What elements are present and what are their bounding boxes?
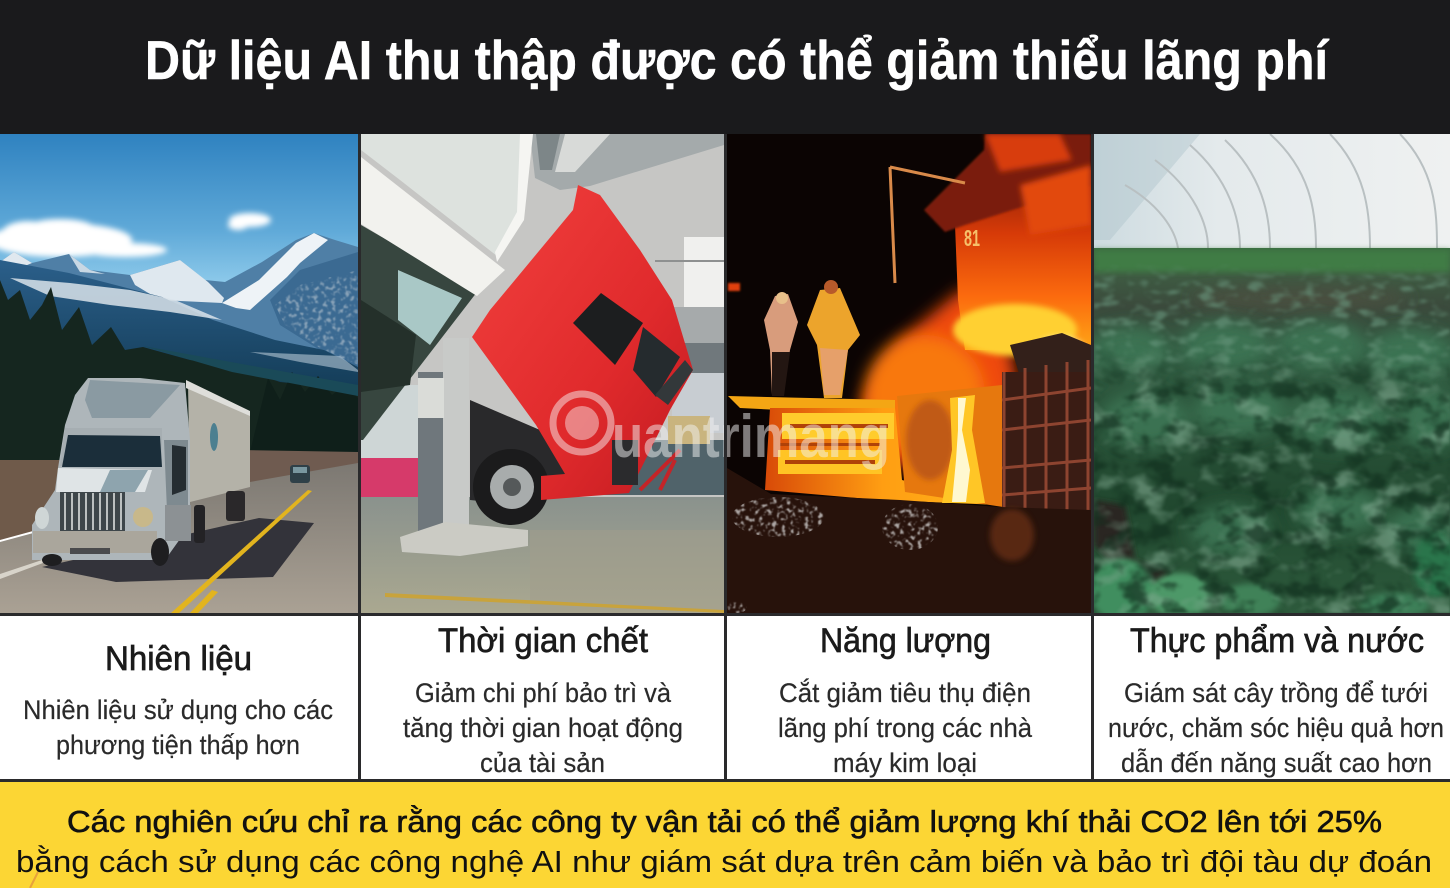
caption: Năng lượng: lãng phí trong các nhà	[778, 713, 1033, 743]
callout text	[16, 804, 1432, 879]
callout text: bằng cách sử dụng các công nghệ AI như giám sát dựa trên cảm biến và bảo trì đội tàu dự đoán	[16, 844, 1432, 879]
workers	[764, 280, 860, 398]
snowy mountains	[0, 233, 358, 400]
truck cab	[32, 378, 205, 566]
road centre line	[171, 490, 312, 613]
panel: food and water field photo	[1090, 134, 1450, 622]
title banner	[0, 0, 1450, 134]
leaf mass mid	[1090, 321, 1450, 554]
back wall fittings	[684, 237, 724, 307]
cooling grid	[1002, 360, 1091, 510]
ceiling	[530, 134, 724, 190]
suspended rod	[890, 167, 965, 283]
red service jack	[640, 450, 680, 490]
near leaf texture	[1094, 340, 1450, 613]
caption: Thực phẩm và nước: Thực phẩm và nước	[1130, 622, 1424, 660]
caption: Thời gian chết: Thời gian chết	[438, 622, 649, 660]
truck trailer	[188, 383, 250, 502]
clouds	[0, 213, 271, 257]
lifted cab white floor	[361, 157, 505, 296]
caption: Nhiên liệu: phương tiện thấp hơn	[56, 730, 300, 760]
caption: Thực phẩm và nước: Giám sát cây trồng để tưới	[1124, 678, 1428, 708]
title: Dữ liệu AI thu thập được có thể giảm thiểu lãng phí	[145, 29, 1330, 91]
molten pour glow	[953, 304, 1077, 356]
panel: energy steel mill photo	[727, 134, 1091, 613]
roadside ground	[0, 460, 60, 540]
small car	[290, 465, 310, 483]
caption: Năng lượng: Năng lượng	[820, 622, 991, 660]
caption: Thời gian chết: tăng thời gian hoạt động	[403, 713, 683, 743]
far leaf texture	[1094, 262, 1450, 382]
furnace hood	[1010, 333, 1091, 372]
caption: Nhiên liệu: Nhiên liệu sử dụng cho các	[23, 695, 333, 725]
pine forest	[0, 280, 358, 470]
slag highlights	[727, 497, 1034, 613]
caption: Năng lượng: máy kim loại	[833, 748, 977, 778]
caption: Thời gian chết: của tài sản	[480, 748, 605, 778]
caption: Thực phẩm và nước	[1108, 622, 1444, 778]
engine and wheel	[470, 400, 575, 525]
watermark	[553, 394, 890, 470]
greenhouse	[1094, 134, 1450, 250]
red truck cab	[472, 185, 693, 500]
truck shadow	[42, 518, 314, 582]
equipment row	[604, 440, 724, 495]
platform and hot machinery	[728, 385, 1003, 507]
caption: Thực phẩm và nước: dẫn đến năng suất cao hơn	[1121, 747, 1432, 778]
caption: Thời gian chết: Giảm chi phí bảo trì và	[415, 678, 672, 708]
panel: fuel truck photo	[0, 134, 358, 613]
ladle	[924, 134, 1091, 350]
panel dividers	[0, 134, 1450, 782]
lift column	[400, 372, 528, 556]
foreground blurred leaves	[1090, 533, 1450, 622]
caption: Nhiên liệu	[23, 640, 333, 760]
lifted cab interior	[361, 225, 477, 440]
panel: downtime workshop photo	[361, 134, 725, 613]
caption: Thời gian chết	[403, 622, 683, 778]
caption: Năng lượng: Cắt giảm tiêu thụ điện	[779, 677, 1031, 708]
furnace glow	[860, 290, 1020, 470]
callout band	[0, 782, 1450, 888]
caption: Năng lượng	[778, 622, 1033, 778]
distant crop rows	[1094, 250, 1450, 272]
road	[0, 463, 358, 613]
pale rear wall	[361, 385, 418, 458]
floor	[361, 497, 724, 613]
watermark: uantrimang	[612, 403, 890, 470]
caption: Nhiên liệu: Nhiên liệu	[105, 640, 252, 678]
ladle: 81	[964, 225, 980, 251]
molten flame	[942, 395, 985, 503]
pink car	[361, 458, 418, 497]
dark slag base	[727, 468, 1091, 613]
soil gap	[1094, 500, 1170, 600]
callout text: Các nghiên cứu chỉ ra rằng các công ty vận tải có thể giảm lượng khí thải CO2 lên tới 25%	[67, 804, 1382, 839]
